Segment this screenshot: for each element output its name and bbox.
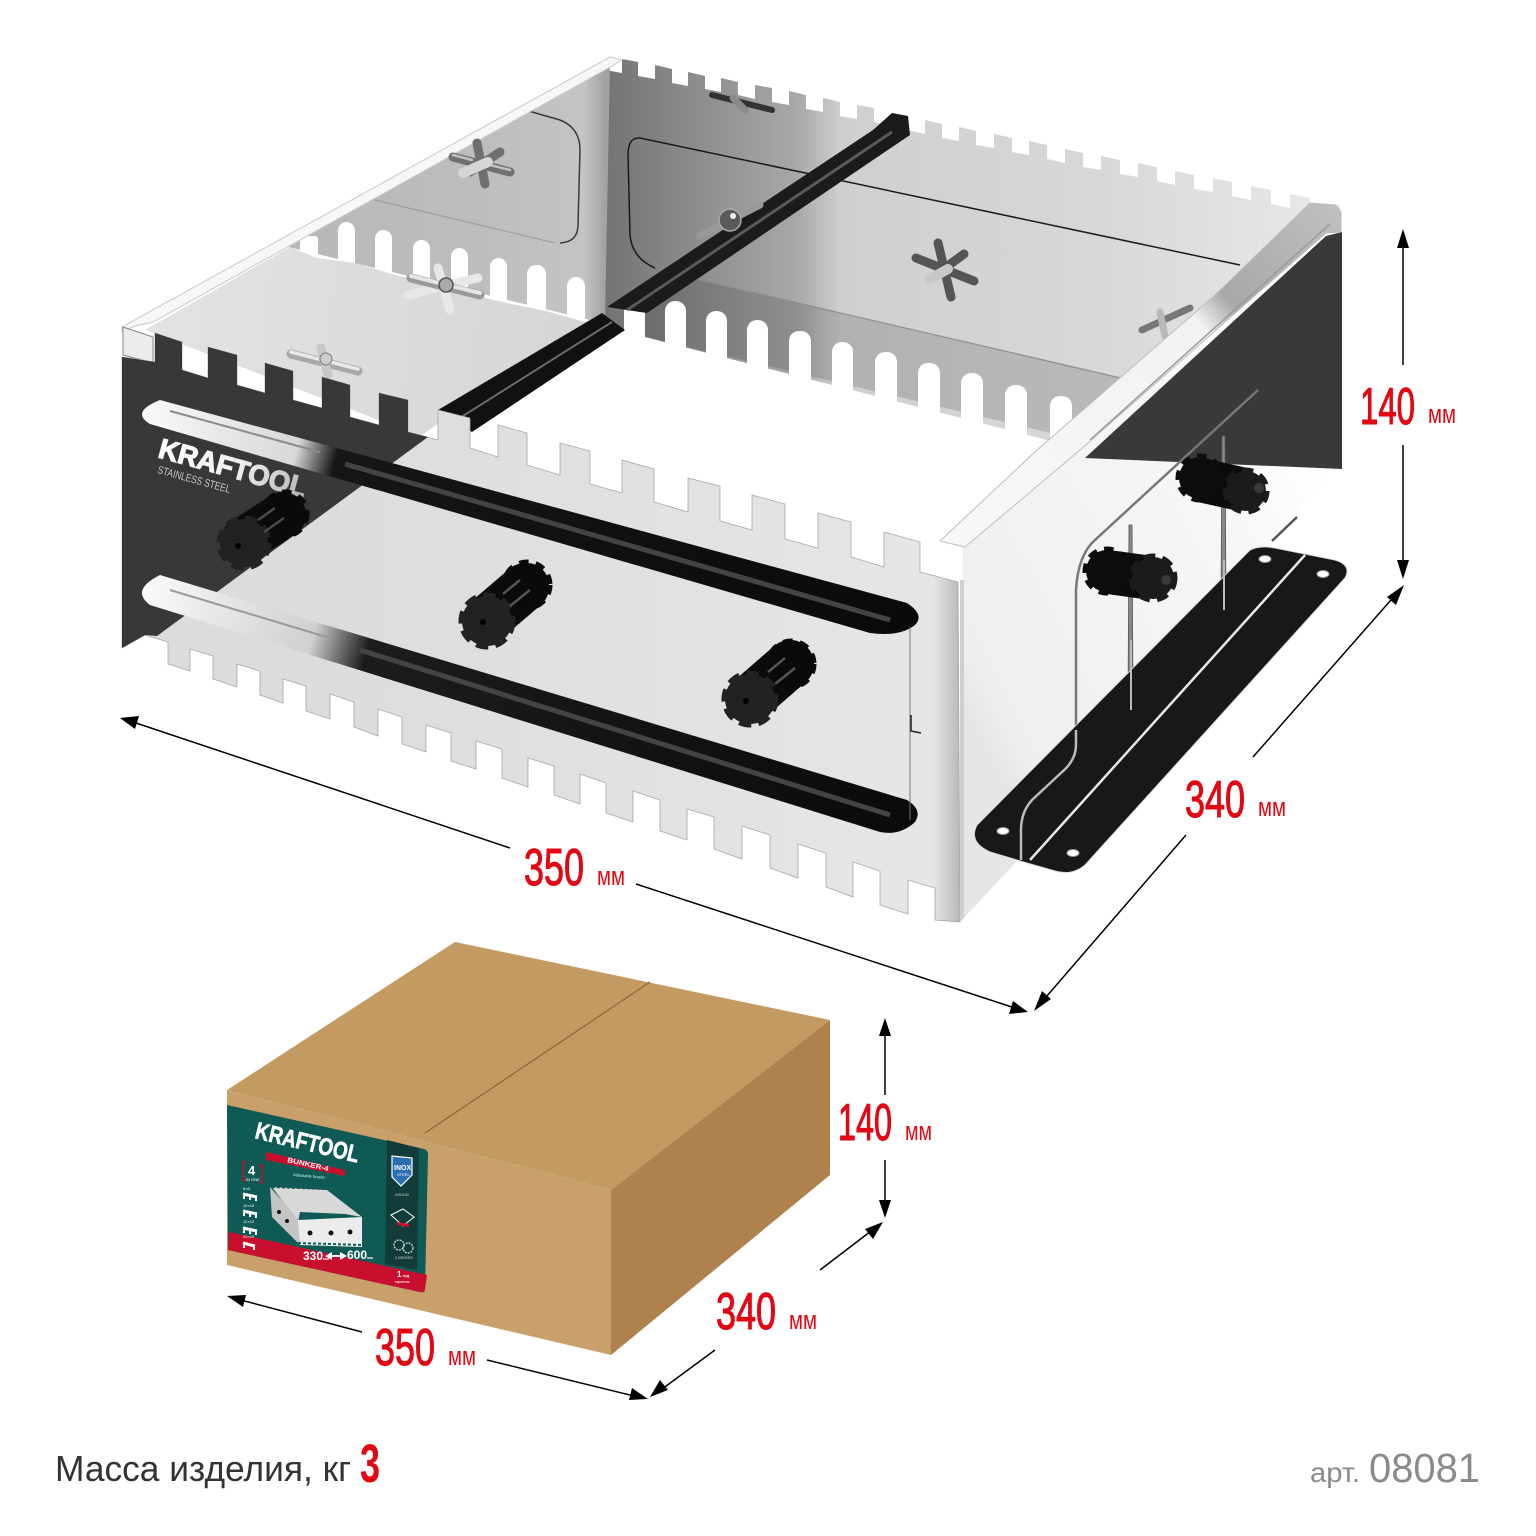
knob 1: [220, 493, 306, 567]
panel: front face: [122, 333, 960, 922]
knob 5: [1179, 457, 1266, 511]
text: article number: [1310, 1445, 1480, 1491]
panel: back-left inner wall: [145, 62, 610, 436]
dark reflection on side: [1085, 232, 1342, 469]
lower slot: [142, 575, 918, 833]
wing nut 3: [291, 348, 358, 374]
side slots of left wall: [300, 222, 585, 325]
rim: [940, 203, 1341, 547]
text: article number: арт.: [1310, 1457, 1360, 1488]
label warranty: гарантия: [395, 1280, 410, 1284]
label warranty: [395, 1270, 410, 1284]
icon: mounting bracket: [974, 547, 1347, 873]
bottom slots of back wall: [624, 292, 1072, 486]
dimension: product width 350 mm: 350: [524, 839, 584, 897]
label INOX badge: INOX: [394, 1165, 411, 1172]
label gears: [394, 1240, 413, 1253]
text: product mass: Масса изделия, кг: [55, 1448, 351, 1489]
text: article number: 08081: [1369, 1445, 1480, 1491]
wing nut 5: [700, 205, 760, 236]
label size range: 600мм: [347, 1248, 373, 1262]
upper slot: [142, 400, 919, 634]
label KRAFTOOL diamond: [391, 1209, 414, 1227]
dimension: product width 350 mm: [120, 716, 1028, 1014]
label dark column: [385, 1140, 419, 1270]
wing nuts: [291, 95, 1190, 374]
box top: [227, 942, 830, 1190]
dark guide strips: [438, 113, 910, 432]
panel: right side face: [940, 203, 1342, 922]
label tooth icons: 12×12: [243, 1219, 255, 1224]
label brand: KRAFTOOL: [253, 1118, 362, 1169]
dimension: box width 350 mm: мм: [448, 1341, 476, 1371]
box label: AISI430: [395, 1192, 410, 1197]
dimension: box width 350 mm: [227, 1295, 648, 1400]
dimension: product height 140 mm: 140: [1360, 378, 1415, 436]
wing nut 4: [712, 95, 772, 110]
label INOX badge: [392, 1156, 412, 1186]
label red band: [228, 1232, 427, 1292]
box right face: [611, 1020, 830, 1355]
corner tab: [123, 327, 153, 363]
tape seam: [425, 982, 650, 1133]
label tooth icons: 20×10: [243, 1234, 255, 1239]
cardboard box: [227, 942, 830, 1355]
wing nut 2: [408, 268, 480, 310]
panel: back-right inner wall: [605, 59, 1340, 486]
dimension: product depth 340 mm: [1034, 585, 1404, 1011]
dimension: product depth 340 mm: 340: [1185, 771, 1245, 829]
box front-left face: [227, 1090, 611, 1355]
dimension: box height 140 mm: 140: [838, 1094, 892, 1152]
dimension: box depth 340 mm: 340: [716, 1283, 776, 1341]
knob 4: [1086, 550, 1174, 599]
label product picture: [270, 1187, 362, 1247]
dimension: product depth 340 mm: мм: [1258, 792, 1286, 822]
shaded lower band of back wall: [625, 274, 1125, 440]
label "4 in one": 4: [248, 1163, 256, 1178]
dimension: box width 350 mm: 350: [375, 1319, 435, 1377]
dimension: product width 350 mm: мм: [597, 861, 625, 891]
label warranty: 1 год: [397, 1270, 410, 1279]
label model band: BUNKER-4: [287, 1157, 329, 1173]
label "4 in one": [243, 1162, 262, 1183]
label size range: [303, 1248, 373, 1263]
product: stainless steel adjustable grill insert: [122, 57, 1347, 922]
wing nut 7: [1142, 308, 1190, 336]
rim of left wall: [122, 57, 622, 332]
dimension: box height 140 mm: [838, 1018, 932, 1218]
sliding plate of left wall: [145, 247, 600, 436]
dimension: box height 140 mm: мм: [905, 1116, 932, 1146]
box label: Adjustable brazier: [293, 1172, 326, 1180]
knob 2: [462, 563, 549, 646]
text: product mass: [55, 1434, 380, 1494]
plate end line and small mark: [909, 627, 911, 820]
dimension: product height 140 mm: [1360, 229, 1456, 579]
label INOX badge: STEEL: [397, 1172, 410, 1177]
box label: 2 MOVES: [395, 1255, 413, 1260]
wing nut 6: [916, 243, 974, 297]
label tooth icons: 10×10: [243, 1203, 255, 1208]
label tooth icons: [243, 1186, 257, 1250]
dimension: product height 140 mm: мм: [1428, 399, 1456, 429]
label "4 in one": IN ONE: [246, 1177, 260, 1182]
sliding plate edge: [1021, 390, 1258, 860]
knob 3: [725, 642, 813, 724]
label tooth icons: 6×6: [243, 1186, 251, 1191]
dimension: box depth 340 mm: [650, 1222, 883, 1397]
text: product mass: 3: [360, 1434, 380, 1494]
brand logo on panel: STAINLESS STEEL: [156, 464, 232, 496]
knobs on front face: [220, 493, 813, 724]
dark reflection: [122, 333, 428, 648]
brand logo on panel: KRAFTOOL: [155, 433, 310, 503]
slots on side: [1128, 525, 1133, 711]
box label: [227, 1105, 428, 1292]
label size range: 330мм: [303, 1249, 329, 1263]
wing nut 1: [453, 143, 510, 184]
knobs on side face: [1086, 457, 1266, 599]
label model band: [266, 1152, 345, 1176]
dimension: box depth 340 mm: мм: [789, 1305, 817, 1335]
